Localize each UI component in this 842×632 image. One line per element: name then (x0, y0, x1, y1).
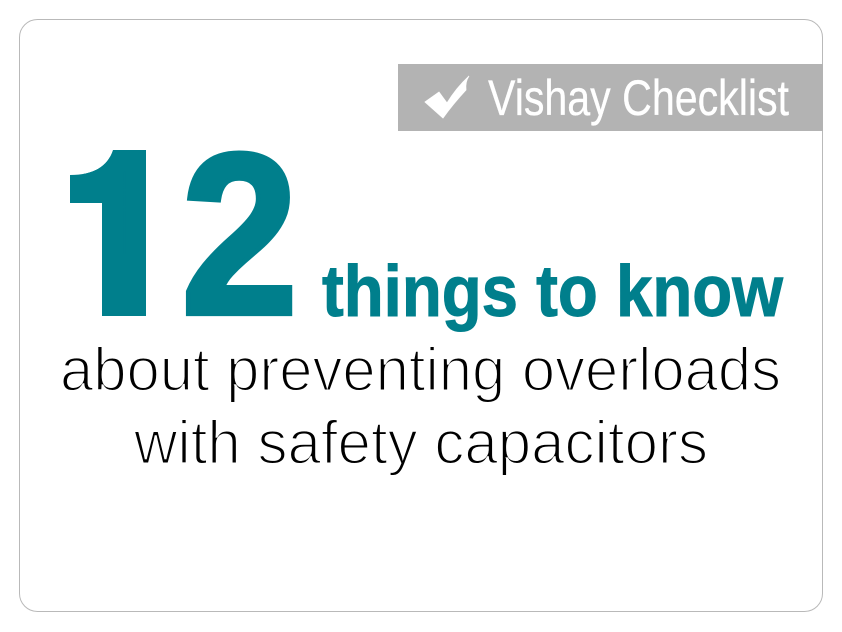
big number 12: 2 (181, 105, 298, 362)
subheading line 2: with safety capacitors (133, 408, 708, 476)
big number 12: 1 (54, 107, 184, 366)
subheading line 1: about preventing overloads (60, 336, 781, 404)
icon: check mark (425, 76, 469, 118)
heading: things to know: things to know (322, 252, 784, 332)
banner: Vishay Checklist (398, 64, 823, 131)
big number 12 (70, 150, 292, 316)
